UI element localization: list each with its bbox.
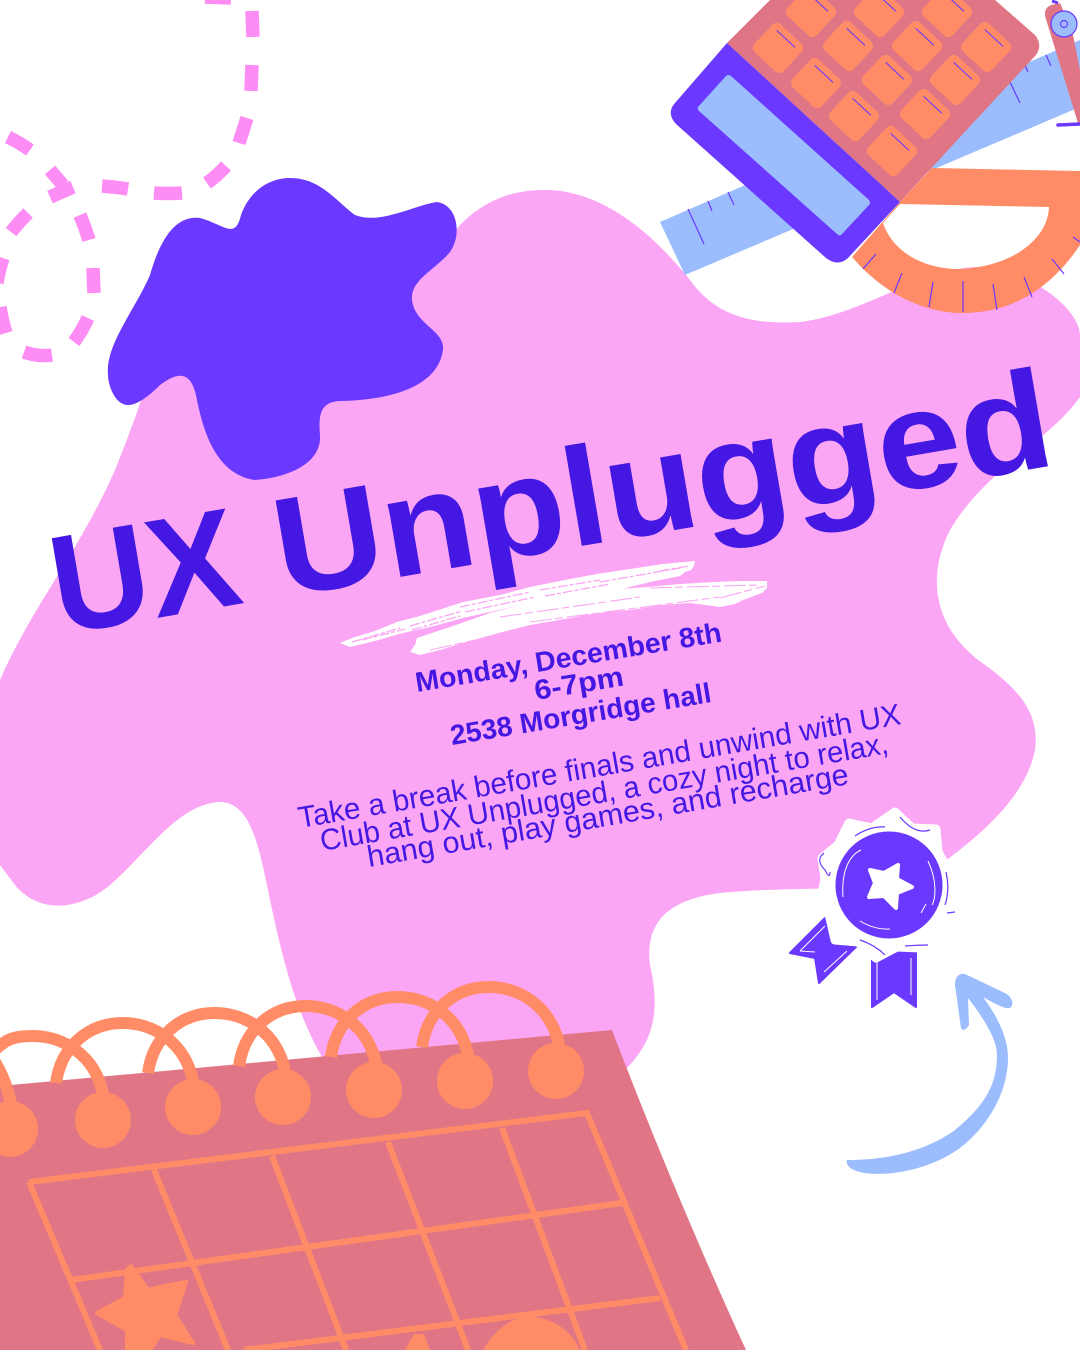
arrow bbox=[847, 974, 1012, 1174]
icon: protractor bbox=[852, 168, 1080, 313]
calculator body bbox=[727, 0, 1039, 202]
calculator display frame bbox=[671, 43, 900, 262]
calendar semicircle bbox=[483, 1317, 580, 1350]
description: hang out, play games, and recharge bbox=[365, 758, 851, 874]
rosette outline accents bbox=[820, 817, 955, 955]
calculator keys bbox=[750, 0, 1014, 179]
date: Monday, December 8th bbox=[413, 617, 724, 698]
disc highlights bbox=[843, 850, 935, 929]
spiral binding rings bbox=[0, 987, 559, 1103]
title bbox=[39, 339, 1063, 664]
icon: calculator bbox=[671, 0, 1039, 262]
white brush stroke bbox=[340, 561, 767, 655]
icon: compass bbox=[1045, 1, 1080, 125]
calendar star bbox=[97, 1266, 193, 1350]
description: Club at UX Unplugged, a cozy night to relax, bbox=[318, 727, 891, 858]
icon: ruler bbox=[660, 40, 1080, 275]
calendar triangle bbox=[405, 1334, 430, 1350]
title: Unplugged bbox=[262, 339, 1063, 627]
dashed loop decoration bbox=[0, 0, 253, 356]
spiral binding holes bbox=[0, 1043, 584, 1157]
pink background blob bbox=[0, 190, 1080, 1150]
star bbox=[869, 865, 912, 908]
description: Take a break before finals and unwind with UX bbox=[296, 698, 903, 835]
calendar grid bbox=[29, 1113, 686, 1350]
time: 6-7pm bbox=[532, 661, 626, 706]
medal disc bbox=[836, 832, 942, 938]
calculator screen bbox=[698, 75, 870, 236]
ribbon highlights bbox=[800, 926, 911, 1000]
ribbons bbox=[790, 914, 916, 1007]
icon: calendar bbox=[0, 987, 746, 1350]
icon: award badge bbox=[790, 812, 955, 1007]
calendar page bbox=[0, 1030, 746, 1350]
rosette bbox=[822, 812, 947, 958]
location: 2538 Morgridge hall bbox=[448, 677, 713, 751]
event details bbox=[413, 617, 724, 751]
title: UX bbox=[39, 478, 250, 664]
purple blob bbox=[108, 178, 457, 480]
